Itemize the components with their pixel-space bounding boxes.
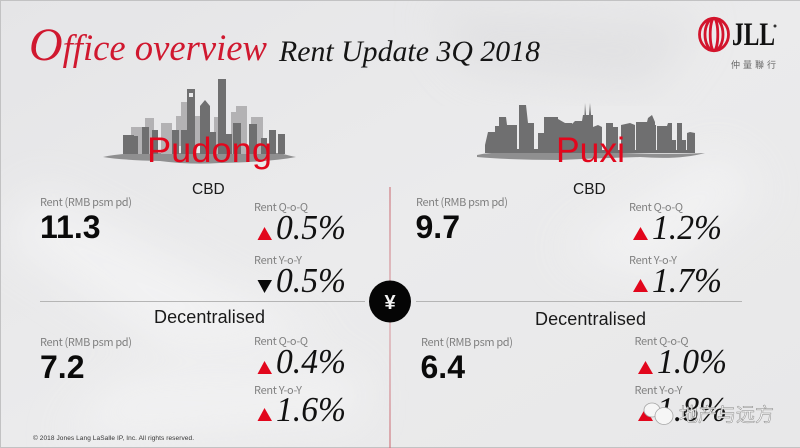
rent value: 6.4 <box>420 349 465 385</box>
rent value: 11.3 <box>40 209 101 245</box>
vertical divider <box>390 187 391 448</box>
YoY label: Rent Y-o-Y <box>254 382 302 398</box>
skyline: Puxi <box>477 103 705 160</box>
YoY label: Rent Y-o-Y <box>634 382 683 398</box>
QoQ label: Rent Q-o-Q <box>254 333 308 349</box>
title: Office overview: Office overview <box>29 19 267 71</box>
JLL logo <box>700 17 779 70</box>
section heading: Decentralised <box>154 307 265 327</box>
panel: Puxi Decentralised <box>420 309 727 429</box>
section heading: Decentralised <box>535 309 646 329</box>
QoQ up arrow <box>633 227 648 240</box>
YoY up arrow <box>633 279 648 292</box>
rent label: Rent (RMB psm pd) <box>40 334 132 350</box>
watermark text: 地产与远方 <box>679 404 774 426</box>
panel: Puxi CBD <box>416 181 722 300</box>
section heading: CBD <box>192 181 225 198</box>
QoQ up arrow <box>638 361 653 374</box>
panel: Pudong Decentralised <box>40 307 346 429</box>
icon: yuan circle: ¥ <box>384 292 396 314</box>
heading: Pudong: Pudong <box>147 131 272 170</box>
title: Rent Update 3Q 2018: Rent Update 3Q 2018 <box>278 35 540 68</box>
icon: chat bubbles <box>644 403 673 424</box>
QoQ label: Rent Q-o-Q <box>254 199 308 215</box>
logo registered mark <box>774 24 776 28</box>
title <box>29 19 540 71</box>
rent label: Rent (RMB psm pd) <box>416 194 508 210</box>
panel: Pudong CBD <box>40 181 346 300</box>
QoQ value: 0.4% <box>276 342 346 381</box>
QoQ label: Rent Q-o-Q <box>629 199 683 215</box>
copyright: © 2018 Jones Lang LaSalle IP, Inc. All rights reserved. <box>33 434 194 442</box>
YoY value: 1.7% <box>652 261 722 300</box>
QoQ up arrow <box>258 361 272 374</box>
YoY value: 1.6% <box>276 390 346 429</box>
YoY label: Rent Y-o-Y <box>254 252 302 268</box>
heading: Puxi: Puxi <box>556 131 625 170</box>
YoY up arrow <box>638 408 653 421</box>
watermark <box>644 403 774 426</box>
horizontal divider left <box>40 301 365 302</box>
QoQ value: 0.5% <box>276 208 346 247</box>
icon: JLL red rings <box>700 18 728 51</box>
QoQ value: 1.0% <box>657 342 727 381</box>
QoQ up arrow <box>258 227 272 240</box>
rent label: Rent (RMB psm pd) <box>40 194 132 210</box>
horizontal divider right <box>416 301 742 302</box>
rent value: 7.2 <box>40 349 84 385</box>
rent label: Rent (RMB psm pd) <box>421 334 513 350</box>
logo wordmark: JLL <box>732 17 775 53</box>
QoQ label: Rent Q-o-Q <box>634 333 688 349</box>
icon: yuan circle <box>369 280 411 322</box>
rent value: 9.7 <box>416 209 460 245</box>
QoQ value: 1.2% <box>652 208 722 247</box>
YoY up arrow <box>258 408 272 421</box>
section heading: CBD <box>573 181 606 198</box>
YoY value: 1.8% <box>657 390 727 429</box>
YoY label: Rent Y-o-Y <box>629 252 677 268</box>
skyline: Pudong <box>103 79 296 164</box>
YoY value: 0.5% <box>276 261 346 300</box>
YoY down arrow <box>258 280 272 293</box>
logo Chinese name: 仲量聯行 <box>731 59 779 70</box>
